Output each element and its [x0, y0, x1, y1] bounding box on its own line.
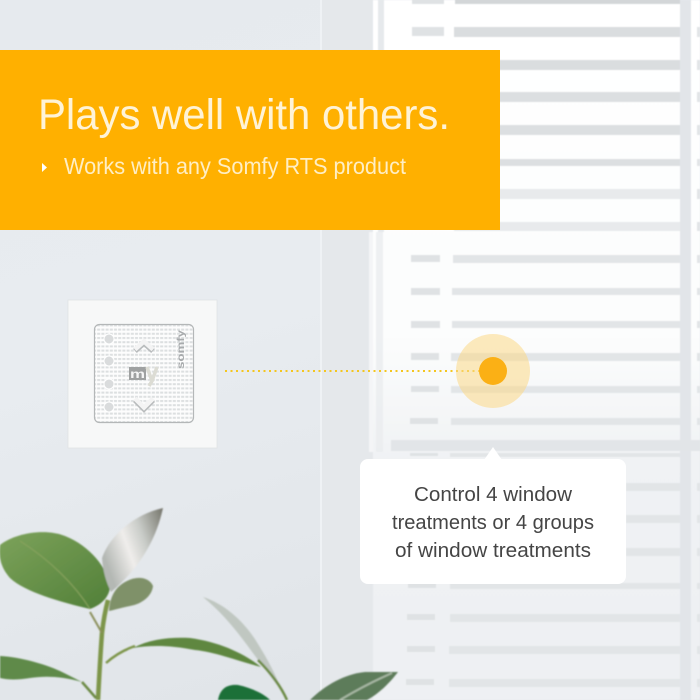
switch frame — [68, 300, 217, 448]
window frame bars — [680, 0, 691, 700]
title: Plays well with others. — [38, 91, 450, 139]
callout: of window treatments — [395, 540, 591, 562]
blind slats: main segments — [449, 0, 680, 687]
plant — [0, 508, 398, 700]
large leaf — [0, 532, 110, 609]
orange header panel — [0, 50, 500, 230]
indicator lights — [104, 334, 114, 412]
hotspot marker — [456, 334, 530, 408]
switch button panel — [94, 324, 194, 422]
callout — [360, 447, 626, 584]
right leaf — [310, 672, 398, 700]
brand label: somfy — [176, 329, 187, 369]
up arrow — [135, 343, 153, 351]
wall switch — [68, 300, 217, 448]
window with blinds — [369, 0, 700, 700]
my button — [129, 367, 146, 380]
dark leaf — [218, 685, 270, 700]
silver leaf — [102, 508, 163, 592]
callout: Control 4 window — [414, 484, 573, 506]
subtitle: Works with any Somfy RTS product — [64, 153, 407, 179]
slats right of frame — [697, 27, 700, 687]
lower left leaf — [0, 656, 82, 682]
wall switch: m — [130, 367, 145, 381]
callout: treatments or 4 groups — [392, 512, 594, 534]
long thin leaf — [133, 638, 261, 667]
bullet arrow — [42, 163, 47, 172]
blind slats: left segments — [406, 0, 444, 685]
grey leaf — [203, 597, 282, 692]
down arrow — [135, 400, 153, 409]
stems — [98, 600, 108, 700]
dotted connector line — [225, 370, 481, 372]
small leaf — [109, 578, 153, 611]
